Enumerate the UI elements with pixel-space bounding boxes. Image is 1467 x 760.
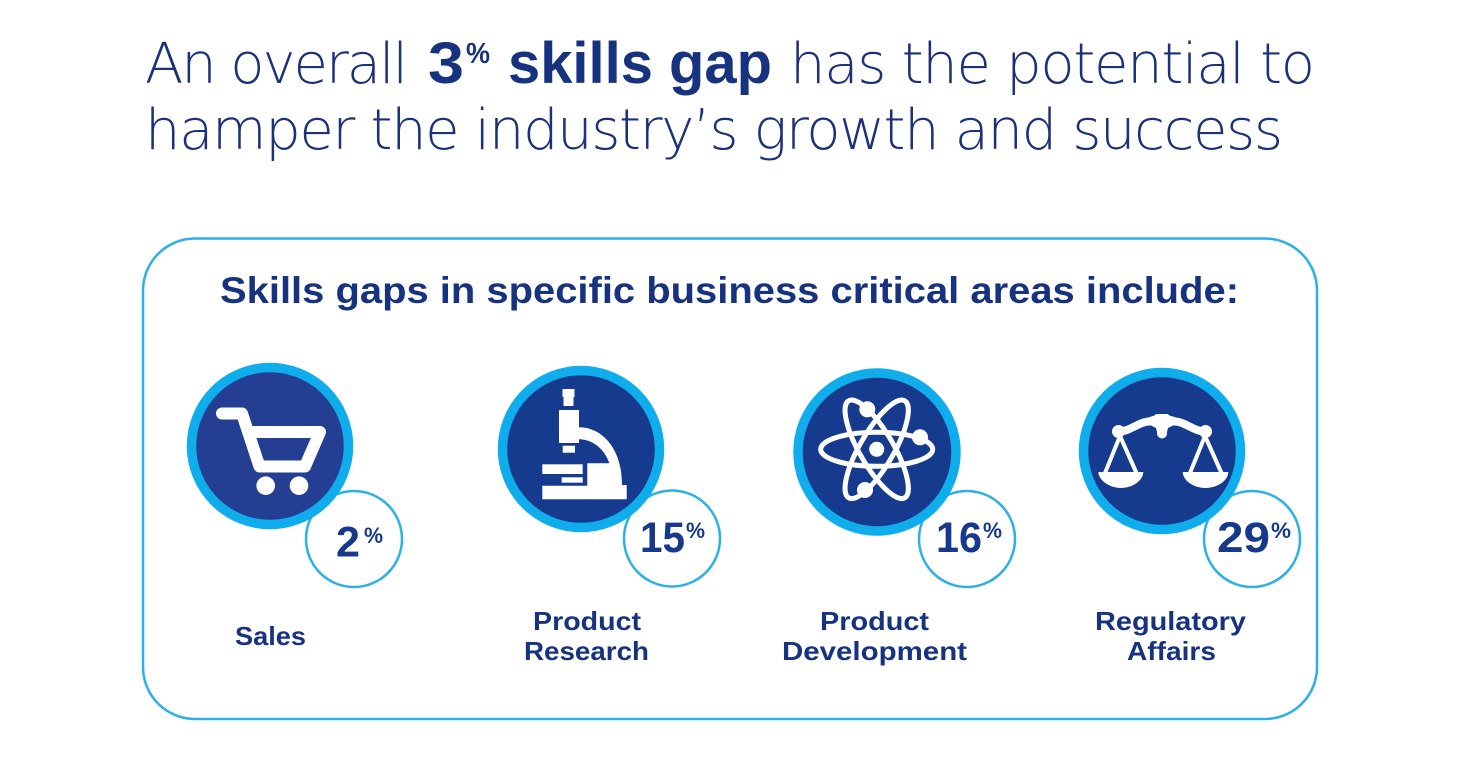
label: Regulatory Affairs bbox=[1095, 606, 1247, 666]
title: skills gap bbox=[508, 31, 772, 96]
badge: 2% bbox=[306, 491, 402, 587]
label: Regulatory Affairs: Affairs bbox=[1127, 636, 1216, 666]
panel: skills gaps bbox=[143, 238, 1317, 719]
badge: 29%: 29 bbox=[1217, 514, 1270, 562]
badge: 2%: % bbox=[364, 523, 383, 548]
label: Product Research: Research bbox=[524, 636, 649, 666]
badge: 16%: 16 bbox=[936, 514, 982, 562]
title: hamper the industry’s growth and success bbox=[145, 98, 1283, 163]
item: product development bbox=[782, 373, 1015, 666]
badge: 16%: % bbox=[983, 518, 1002, 543]
badge: 16% bbox=[919, 491, 1015, 587]
icon: microscope bbox=[502, 370, 660, 528]
label: Product Development: Product bbox=[820, 606, 929, 636]
item: product research bbox=[502, 370, 720, 666]
title: % bbox=[466, 38, 490, 70]
item: regulatory affairs bbox=[1084, 372, 1300, 666]
badge: 2%: 2 bbox=[336, 518, 360, 566]
badge: 15%: 15 bbox=[640, 514, 685, 562]
label: Product Research: Product bbox=[533, 606, 641, 636]
item: sales bbox=[192, 368, 402, 651]
label: Sales: Sales bbox=[235, 621, 306, 651]
label: Product Development: Development bbox=[782, 636, 967, 666]
icon: shopping cart bbox=[192, 368, 348, 524]
title bbox=[145, 31, 1315, 163]
badge: 29% bbox=[1204, 491, 1300, 587]
icon: scales bbox=[1084, 372, 1240, 530]
label: Product Research bbox=[524, 606, 649, 666]
title: An overall bbox=[145, 32, 408, 97]
label: Product Development bbox=[782, 606, 967, 666]
label: Regulatory Affairs: Regulatory bbox=[1095, 606, 1247, 636]
title: 3 bbox=[428, 31, 464, 96]
badge: 15%: % bbox=[686, 518, 705, 543]
badge: 29%: % bbox=[1271, 518, 1291, 543]
badge: 15% bbox=[624, 490, 720, 586]
title: has the potential to bbox=[790, 32, 1315, 97]
heading: Skills gaps in specific business critical areas include: bbox=[220, 270, 1239, 311]
icon: atom bbox=[798, 373, 956, 531]
